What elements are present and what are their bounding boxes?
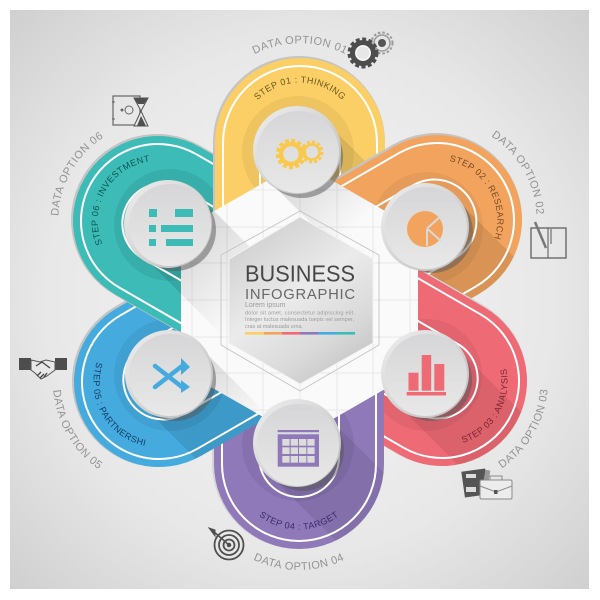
step label 05: STEP 05 : PARTNERSHI [94,362,146,446]
data option label 03: DATA OPTION 03 [498,390,548,468]
step label 04: STEP 04 : TARGET [260,511,337,530]
data option label 01: DATA OPTION 01 [252,36,346,54]
text block: lorem ipsum: dolor sit amet, consectetur adipiscing elit. [245,310,355,316]
icon: gears outline [349,32,392,67]
circle button: step 01 gears [253,106,343,198]
icon: shuffle arrows [155,358,190,393]
petal: step 01 yellow band [213,56,385,212]
circle button: step 04 calendar [253,399,344,491]
center hexagon title card [221,211,379,391]
step label 03: STEP 03 : ANALYSIS [462,369,508,442]
rainbow divider bar [245,332,355,335]
step label 02: STEP 02 : RESEARCH [450,156,504,240]
text block: lorem ipsum [245,302,355,330]
icon: target and arrow [209,528,244,560]
step label 06: STEP 06 : INVESTMENT [92,155,149,246]
icon: notebook and pen [531,222,566,258]
petal: step 05 blue band [72,301,262,467]
circle button: step 06 list [124,180,216,271]
icon: newspaper and briefcase [461,468,512,499]
petal: step 02 orange band [332,133,522,298]
icon: handshake [19,358,67,379]
data option label 02: DATA OPTION 02 [492,130,544,214]
icon: list [149,209,193,246]
teal band overlap above blue [82,262,181,332]
text block: lorem ipsum: Lorem ipsum [245,302,286,309]
circle button: step 02 pie chart [381,183,473,273]
icon: bar chart [407,355,446,396]
icon: gears [278,140,322,168]
petal: step 04 purple band [212,390,384,549]
heading: business: BUSINESS [245,260,355,286]
white hexagon panel [181,179,418,419]
circle button: step 05 shuffle [125,330,216,421]
text block: lorem ipsum: Integer luctus malesuada tuepis vel semper, [245,317,354,323]
text block: lorem ipsum: cras at malesuada urna. [245,324,303,330]
icon: pie chart [407,211,443,247]
data option label 04: DATA OPTION 04 [254,553,344,570]
step label 01: STEP 01 : THINKING [254,76,345,100]
petal: step 06 teal band [71,134,213,332]
circle button: step 03 bar chart [381,330,472,421]
heading: infographic: INFOGRAPHIC [245,287,355,303]
data option label 06: DATA OPTION 06 [50,132,102,216]
data option label 05: DATA OPTION 05 [53,390,102,468]
icon: safe and hourglass [112,96,148,126]
petal: step 03 red band [384,270,527,466]
icon: calendar [278,430,319,467]
